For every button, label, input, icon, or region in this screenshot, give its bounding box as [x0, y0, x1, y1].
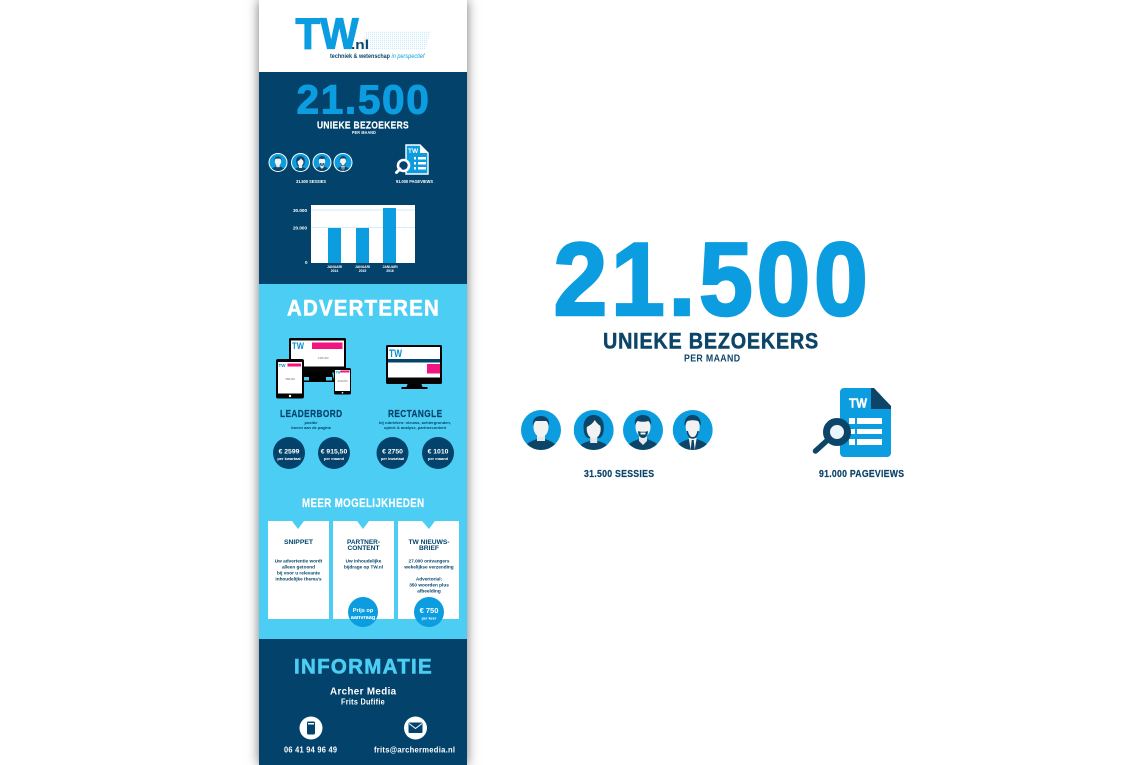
- text: contact name: Archer Media: [330, 686, 396, 698]
- icons: four visitor avatars: [521, 410, 713, 450]
- icons: visitors small: [268, 153, 352, 172]
- card: tw nieuwsbrief: 27.000 ontvangers: [409, 558, 450, 564]
- bar chart: 2014: [331, 269, 338, 273]
- card: snippet: inhoudelijke thema's: [275, 576, 322, 582]
- bar chart: [293, 205, 415, 273]
- panel: visitors: [259, 72, 467, 284]
- text: leaderbord: positie: [305, 420, 318, 425]
- price badge: 915,50: € 915,50: [321, 448, 347, 456]
- icon: document with magnifier: [816, 388, 891, 457]
- icon: document small: [396, 145, 428, 174]
- heading: informatie: INFORMATIE: [294, 656, 433, 679]
- bar chart: 2016: [386, 269, 394, 273]
- icon: phone: [300, 716, 322, 740]
- card: tw nieuwsbrief: Advertorial:: [416, 576, 443, 582]
- icon: leaderboard devices: 468x60: [285, 377, 295, 381]
- card: tw nieuwsbrief: 350 woorden plus: [409, 582, 449, 588]
- text: rectangle: RECTANGLE: [388, 409, 442, 420]
- headline number: 21.500: [554, 222, 872, 338]
- text: contact name: [330, 686, 396, 706]
- subheading small: UNIEKE BEZOEKERS: [317, 120, 409, 132]
- headline number small: 21.500: [296, 76, 430, 122]
- price badge: op aanvraag: aanvraag: [351, 615, 376, 621]
- bar chart: 0: [305, 260, 308, 265]
- label: sessions: 31.500 SESSIES: [584, 469, 654, 480]
- card: snippet: Uw advertentie wordt: [275, 558, 323, 564]
- header: TW.nl logo: in perspectief: [392, 54, 426, 60]
- price badge: 1010: [422, 437, 454, 469]
- price badge: 915,50: per maand: [324, 456, 345, 461]
- card: tw nieuwsbrief: afbeelding: [417, 588, 441, 594]
- icon: document small: TW: [408, 148, 419, 155]
- price badge: 2599: per kwartaal: [277, 456, 301, 461]
- icon: document with magnifier: TW: [849, 396, 868, 410]
- card: partnercontent: [333, 521, 394, 627]
- icon: leaderboard devices: 320x50: [338, 379, 348, 383]
- subheading small: [317, 120, 409, 135]
- icon: rectangle monitor: [386, 345, 442, 389]
- price badge: 2599: € 2599: [279, 448, 300, 456]
- bar chart: 30.000: [293, 208, 308, 213]
- bar chart: JANUARI: [382, 265, 398, 269]
- heading: adverteren: ADVERTEREN: [287, 296, 440, 321]
- card: tw nieuwsbrief: wekelijkse verzending: [403, 564, 454, 570]
- icon: mail: [404, 716, 427, 740]
- card: tw nieuwsbrief: TW NIEUWS-: [408, 539, 450, 546]
- card: snippet: alleen getoond: [282, 564, 315, 570]
- bar chart: 2015: [359, 269, 366, 273]
- subheading: PER MAAND: [684, 354, 740, 364]
- price badge: op aanvraag: [348, 597, 378, 627]
- icon: leaderboard devices: TW: [278, 363, 286, 368]
- bar chart: JANUARI: [327, 265, 342, 269]
- price badge: 750: per keer: [422, 616, 437, 620]
- price badge: 2750: € 2750: [382, 448, 403, 456]
- icon: leaderboard devices: TW: [336, 370, 341, 374]
- card: partnercontent: Uw inhoudelijke: [346, 558, 382, 564]
- card: snippet: bij voor u relevante: [277, 570, 320, 576]
- price badge: 1010: € 1010: [428, 448, 449, 456]
- price badge: op aanvraag: Prijs op: [353, 608, 374, 614]
- header: TW.nl logo: .nl: [351, 37, 369, 52]
- icon: leaderboard devices: 728x90: [318, 356, 329, 360]
- text: leaderbord: LEADERBORD: [280, 409, 342, 420]
- text: leaderbord: boven aan de pagina: [291, 425, 332, 430]
- text: phone number: 06 41 94 96 49: [284, 746, 338, 754]
- card: snippet: SNIPPET: [284, 539, 314, 546]
- bar chart: JANUARI: [355, 265, 370, 269]
- header: TW.nl logo: techniek & wetenschap: [330, 54, 390, 60]
- panel: informatie: [259, 639, 467, 765]
- subheading small: PER MAAND: [352, 130, 376, 135]
- price badge: 750: € 750: [420, 606, 438, 615]
- price badge: 2750: per kwartaal: [381, 456, 404, 461]
- text: rectangle: bij rubrieken: nieuws, achtergronden,: [379, 420, 451, 425]
- header: TW.nl logo: [259, 0, 467, 72]
- text: rectangle: [379, 409, 451, 430]
- label: pageviews: 91.000 PAGEVIEWS: [819, 469, 904, 480]
- subheading: UNIEKE BEZOEKERS: [603, 329, 819, 354]
- price badge: 2750: [376, 437, 408, 469]
- icon: leaderboard devices: [276, 338, 351, 398]
- panel: adverteren: [259, 284, 467, 639]
- card: tw nieuwsbrief: BRIEF: [419, 545, 439, 552]
- card: partnercontent: bijdrage op TW.nl: [344, 564, 383, 570]
- card: tw nieuwsbrief: [398, 521, 459, 627]
- text: email: frits@archermedia.nl: [374, 746, 455, 754]
- icon: rectangle monitor: TW: [389, 348, 402, 360]
- text: leaderbord: [280, 409, 342, 430]
- card: snippet: [268, 521, 329, 619]
- price badge: 2599: [273, 437, 305, 469]
- label: pageviews small: 91.000 PAGEVIEWS: [396, 179, 434, 185]
- bar chart: 20.000: [293, 226, 308, 230]
- header: TW.nl logo: TW: [296, 10, 359, 58]
- icon: leaderboard devices: TW: [292, 341, 304, 351]
- card: partnercontent: CONTENT: [348, 545, 380, 552]
- card: partnercontent: PARTNER-: [347, 539, 380, 546]
- text: rectangle: opinie & analyse, partnercontent: [384, 425, 447, 430]
- price badge: 750: [414, 597, 444, 627]
- heading: meer mogelijkheden: MEER MOGELIJKHEDEN: [302, 496, 424, 510]
- label: sessions small: 31.500 SESSIES: [296, 179, 327, 185]
- price badge: 915,50: [318, 437, 350, 469]
- price badge: 1010: per maand: [428, 456, 449, 461]
- text: contact name: Frits Dufifie: [341, 698, 385, 706]
- subheading: [603, 329, 819, 364]
